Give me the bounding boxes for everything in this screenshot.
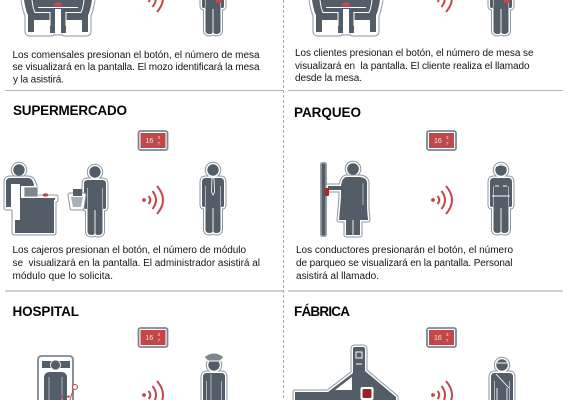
- icon: customer with basket: [70, 166, 106, 235]
- description: Los clientes presionan el botón, el número de mesa se: [295, 48, 534, 59]
- icon: display: [138, 328, 168, 347]
- heading: HOSPITAL: [12, 304, 79, 319]
- description: [12, 245, 260, 282]
- description: Los conductores presionarán el botón, el número: [296, 245, 513, 256]
- description: asistirá al llamado.: [296, 271, 379, 282]
- icon: signal: [142, 381, 163, 400]
- description: [295, 48, 534, 84]
- icon: diners at table: [23, 0, 93, 34]
- panel: hospital: [12, 304, 225, 400]
- panel: supermercado: [6, 103, 260, 282]
- icon: display: [138, 131, 168, 150]
- description: desde la mesa.: [295, 73, 362, 84]
- icon: driver at post: [321, 163, 368, 236]
- panel: cafetería: [295, 0, 534, 84]
- icon: patient in bed: [38, 356, 78, 400]
- icon: signal: [142, 186, 163, 214]
- icon: cashier at counter: [6, 164, 56, 233]
- icon: signal: [148, 0, 163, 12]
- description: [296, 245, 513, 282]
- panel: fábrica: [294, 304, 513, 400]
- description: de parqueo se visualizará en la pantalla. Personal: [296, 258, 512, 269]
- icon: machine: [295, 347, 396, 400]
- description: se visualizará en la pantalla. El mozo identificará la mesa: [12, 62, 260, 73]
- description: se visualizará en la pantalla. El administrador asistirá al: [12, 258, 260, 269]
- description: y la asistirá.: [13, 74, 64, 86]
- heading: PARQUEO: [294, 105, 361, 120]
- icon: signal: [431, 381, 452, 400]
- icon: waiter: [490, 0, 512, 34]
- heading: FÁBRICA: [294, 304, 350, 319]
- icon: display: [427, 328, 456, 347]
- icon: signal: [438, 0, 452, 12]
- icon: security guard: [490, 164, 512, 233]
- icon: nurse: [203, 353, 225, 400]
- heading: SUPERMERCADO: [13, 103, 127, 118]
- icon: display: [427, 131, 456, 150]
- panel: restaurante: [12, 0, 260, 86]
- column divider: [282, 0, 284, 400]
- description: Los comensales presionan el botón, el número de mesa: [12, 50, 260, 61]
- description: [12, 50, 260, 86]
- panel: parqueo: [294, 105, 513, 282]
- description: módulo que lo solicita.: [12, 271, 113, 282]
- icon: customers at table: [311, 0, 381, 34]
- icon: waiter: [202, 0, 224, 34]
- icon: worker: [491, 359, 513, 400]
- description: Los cajeros presionan el botón, el número de módulo: [12, 245, 246, 256]
- row divider 1: [5, 90, 283, 92]
- description: visualizará en la pantalla. El cliente realiza el llamado: [295, 61, 530, 72]
- icon: signal: [431, 186, 452, 214]
- icon: administrator: [202, 164, 224, 233]
- row divider 1 right: [288, 90, 563, 92]
- row divider 2 right: [288, 290, 563, 292]
- row divider 2: [5, 290, 283, 292]
